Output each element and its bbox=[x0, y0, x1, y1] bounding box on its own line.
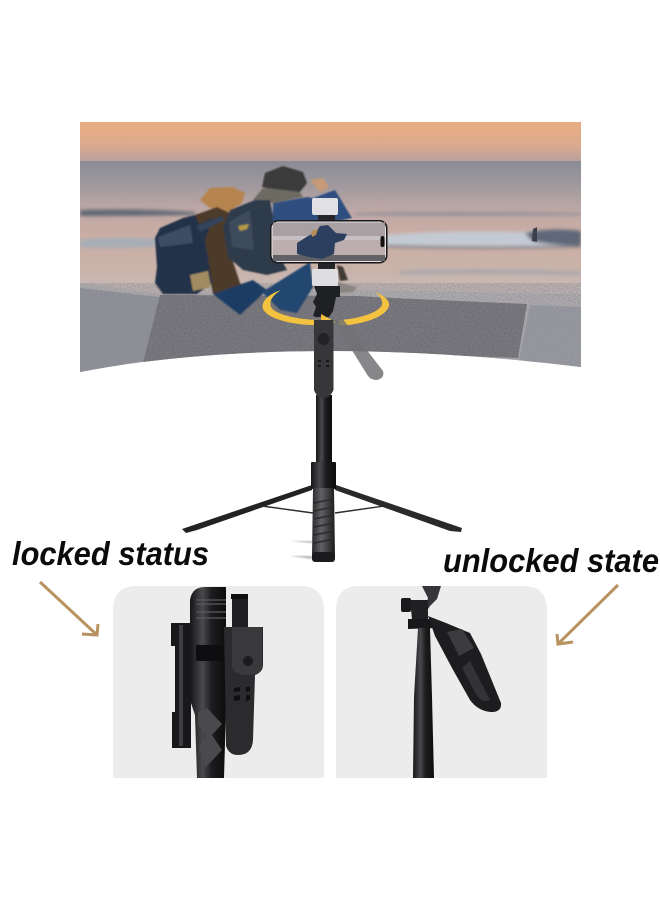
man scarf bbox=[253, 188, 303, 203]
handle body bbox=[314, 320, 334, 398]
arrow: locked status bbox=[40, 582, 98, 635]
translucent handle bbox=[335, 318, 383, 380]
knob bbox=[401, 598, 411, 612]
surfer bbox=[532, 227, 537, 242]
ball head bbox=[232, 594, 248, 628]
waves bbox=[80, 209, 581, 275]
people bbox=[155, 166, 357, 315]
man backpack bbox=[223, 200, 287, 275]
leg braces bbox=[262, 506, 384, 513]
panel: locked device bbox=[113, 586, 324, 778]
main pole bbox=[190, 587, 226, 778]
rear clamp bbox=[171, 623, 191, 748]
man head bbox=[262, 166, 307, 192]
gimbal head bbox=[313, 286, 340, 317]
phone clamp arm bbox=[422, 586, 441, 612]
sunset sky bbox=[80, 122, 581, 162]
rotation arrow bbox=[262, 290, 390, 326]
sea bbox=[80, 161, 581, 301]
woman hair bbox=[200, 187, 245, 212]
bottom fill light bbox=[312, 269, 338, 286]
phone bbox=[270, 220, 388, 264]
telescopic pole bbox=[413, 628, 434, 778]
left backpack bbox=[155, 215, 213, 294]
man upper jacket bbox=[272, 189, 353, 222]
label: locked status: locked status bbox=[12, 535, 209, 572]
man lower blue jacket and scarf end bbox=[213, 280, 267, 315]
phone mount and lights bbox=[312, 198, 338, 286]
open handle bbox=[428, 616, 501, 712]
upper pole bbox=[316, 395, 332, 463]
panel: unlocked device bbox=[336, 586, 547, 778]
man hand bbox=[310, 178, 329, 192]
handle bbox=[224, 627, 263, 755]
diamond grip bbox=[198, 708, 222, 768]
collar bbox=[311, 462, 336, 489]
panel: beach photo with selfie stick phone bbox=[80, 122, 581, 373]
sea wall bbox=[80, 283, 581, 373]
shadows bbox=[290, 541, 312, 559]
grip bbox=[312, 488, 335, 562]
plate bbox=[408, 619, 436, 629]
arrow: unlocked state bbox=[557, 585, 618, 644]
top fill light bbox=[312, 198, 338, 215]
tripod selfie stick bbox=[182, 320, 462, 562]
woman coat bbox=[195, 207, 247, 294]
tripod legs bbox=[182, 485, 312, 533]
man boot bbox=[337, 265, 348, 281]
